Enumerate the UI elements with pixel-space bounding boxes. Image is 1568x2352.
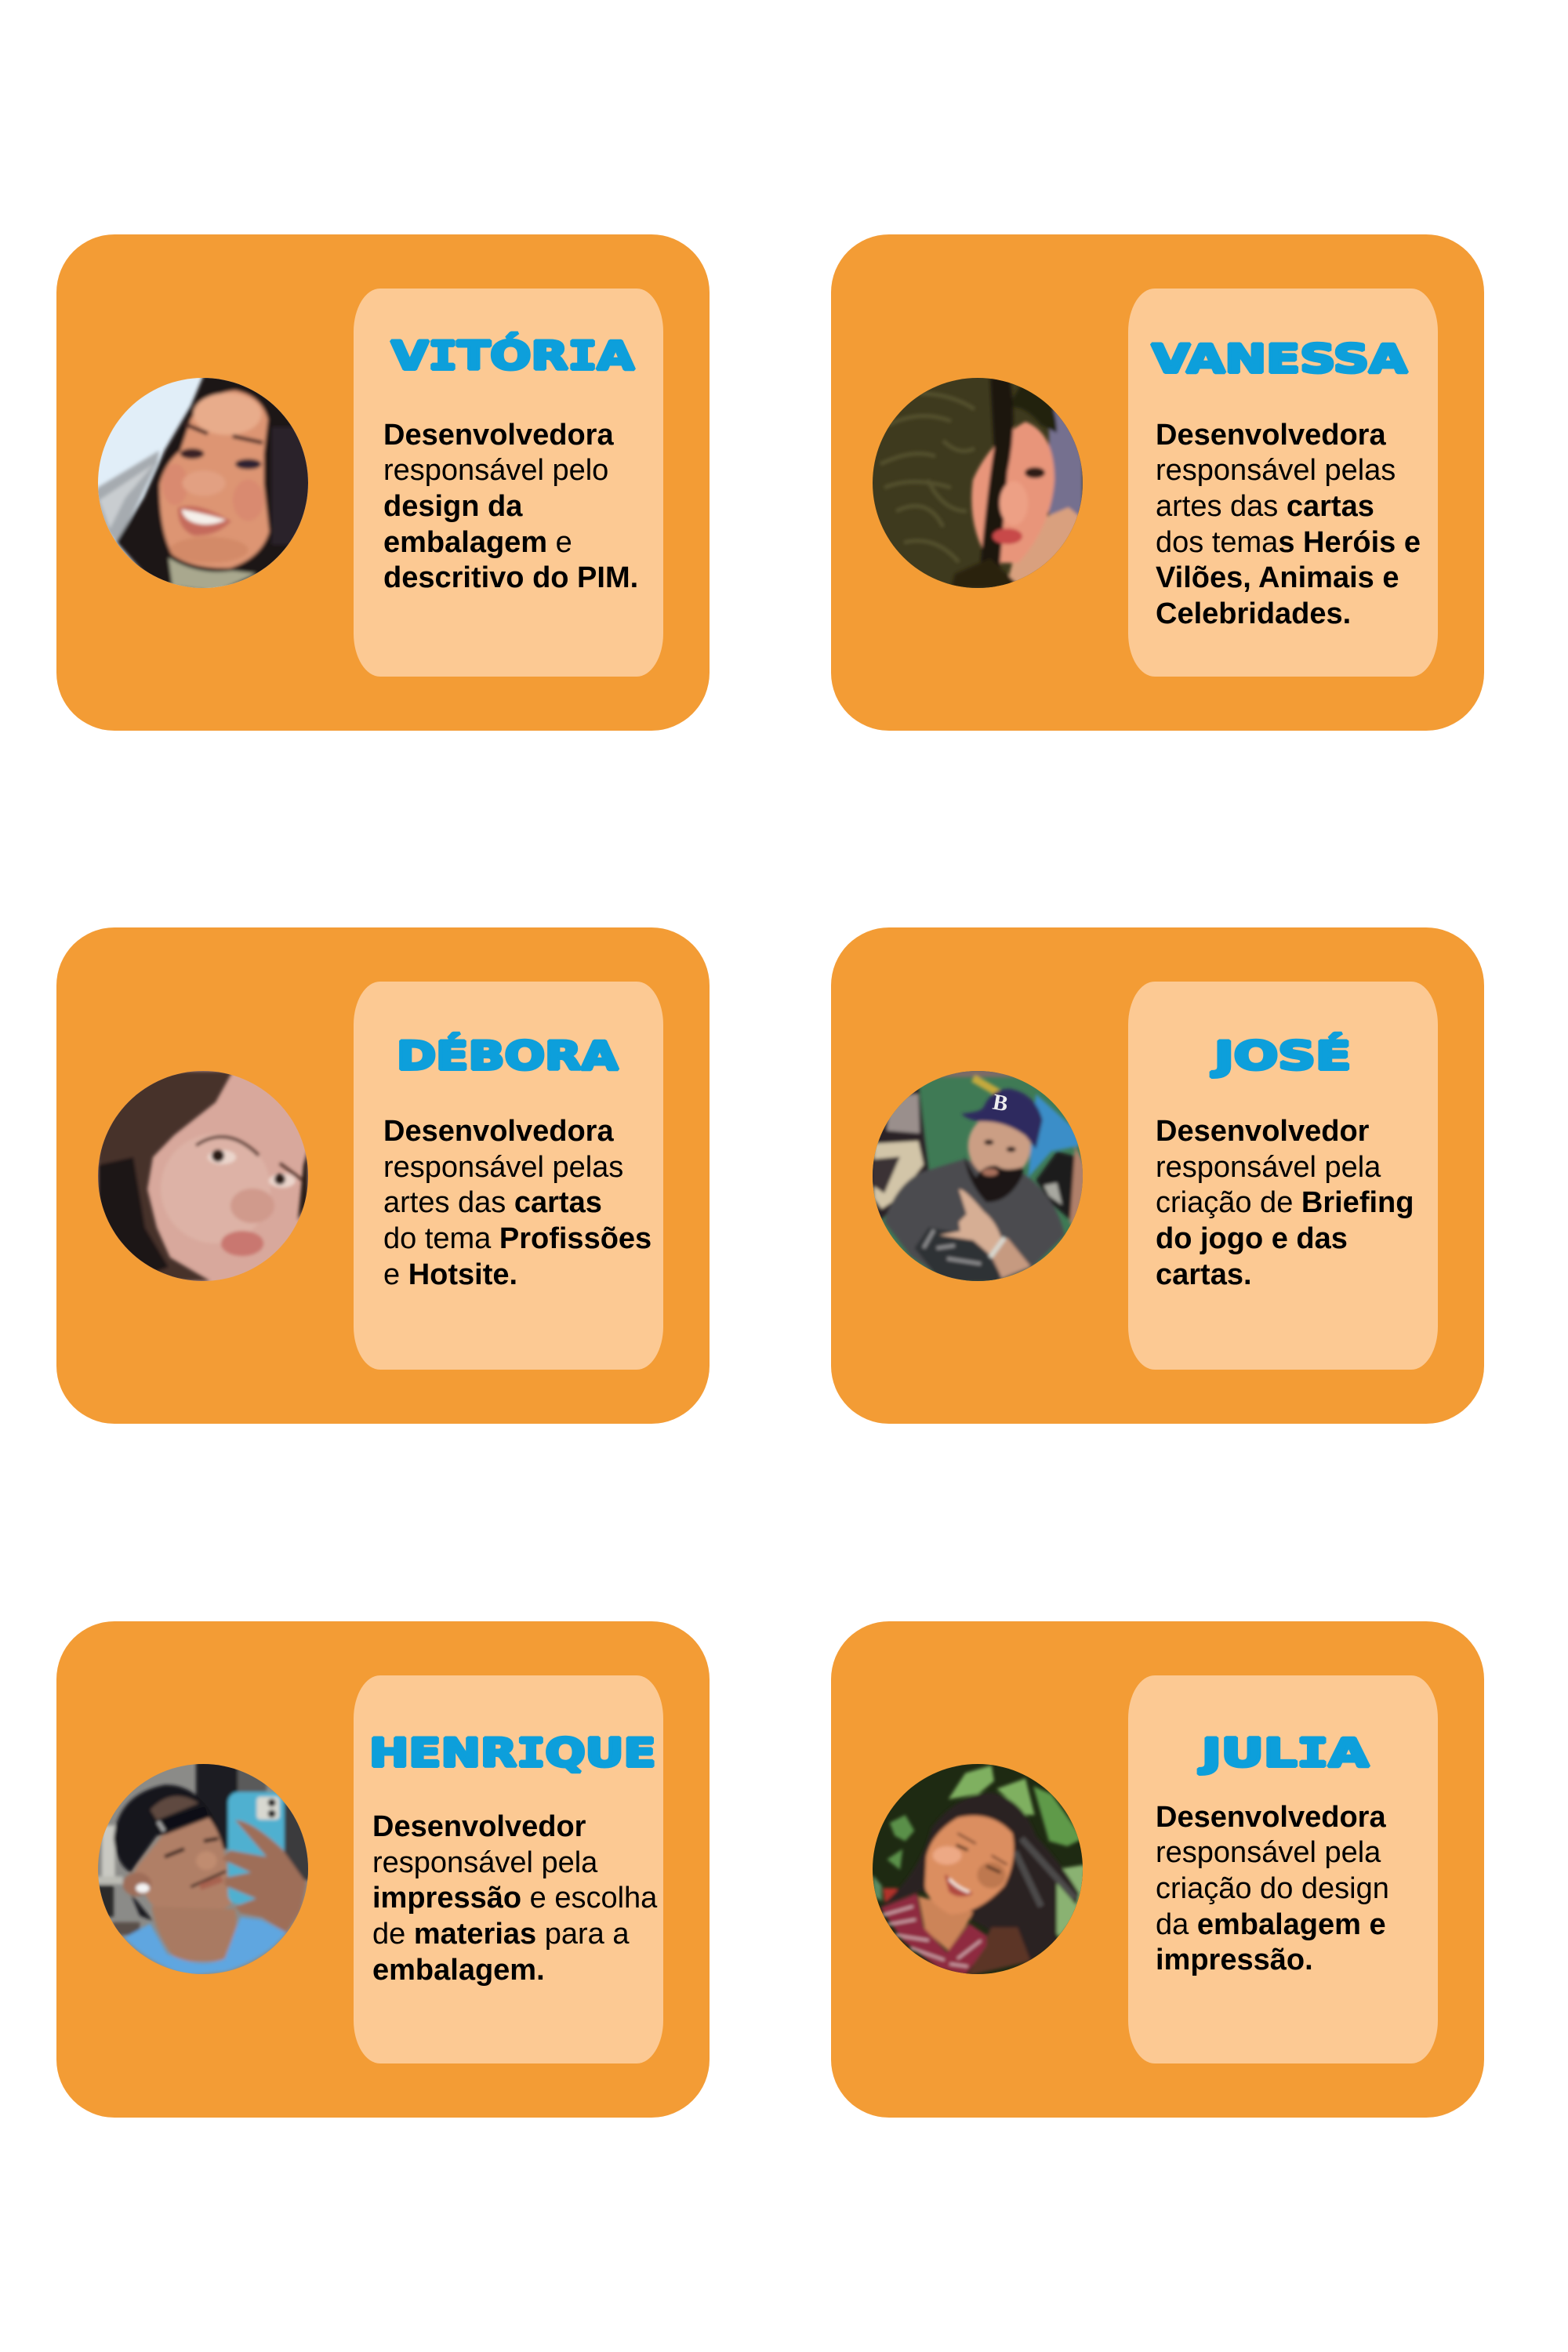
name: Henrique: HENR IQUE — [369, 1730, 656, 1776]
name: José: JOSÉ — [1211, 1033, 1351, 1079]
description: Débora: e Hotsite. — [383, 1258, 517, 1291]
name: Julia: JUL IA — [1199, 1730, 1369, 1776]
panel: Vitória card — [56, 234, 710, 731]
panel: Débora card — [56, 927, 710, 1424]
description: Débora: artes das cartas — [383, 1186, 602, 1219]
text panel: Vitória — [354, 289, 663, 677]
text panel: José — [1128, 982, 1438, 1370]
text panel: Henrique — [354, 1675, 663, 2063]
description: Vitória: embalagem e — [383, 526, 572, 559]
description: Débora — [383, 1115, 652, 1291]
description: Henrique: impressão e escolha — [372, 1882, 657, 1915]
description: Vanessa — [1156, 419, 1421, 630]
description: Débora: responsável pelas — [383, 1151, 623, 1184]
description: Vanessa: Vilões, Animais e — [1156, 561, 1399, 594]
description: José: cartas. — [1156, 1258, 1252, 1291]
description: Henrique — [372, 1810, 657, 1987]
description: Débora: do tema Profissões — [383, 1222, 652, 1255]
photo: Julia — [873, 1764, 1083, 1974]
description: Vanessa: dos temas Heróis e — [1156, 526, 1421, 559]
photo: Vitória — [98, 378, 308, 588]
description: Vanessa: responsável pelas — [1156, 454, 1396, 487]
text panel: Julia — [1128, 1675, 1438, 2063]
description: Julia: criação do design — [1156, 1872, 1389, 1905]
description: José: responsável pela — [1156, 1151, 1381, 1184]
name: Débora: DÉBORA — [397, 1033, 618, 1079]
panel: Henrique card — [56, 1621, 710, 2118]
cap logo: B — [991, 1090, 1010, 1116]
description: José: do jogo e das — [1156, 1222, 1348, 1255]
text panel: Débora — [354, 982, 663, 1370]
photo: José — [873, 1071, 1083, 1281]
name: Vanessa: VANESSA — [1152, 336, 1408, 382]
description: Vanessa: artes das cartas — [1156, 490, 1374, 523]
description: Henrique: de materias para a — [372, 1918, 629, 1951]
panel: Julia card — [831, 1621, 1484, 2118]
description: Julia — [1156, 1801, 1389, 1976]
description: José: Desenvolvedor — [1156, 1115, 1369, 1148]
photo: Henrique — [98, 1764, 308, 1974]
description: Julia: impressão. — [1156, 1944, 1313, 1976]
description: Henrique: embalagem. — [372, 1954, 545, 1987]
description: Henrique: Desenvolvedor — [372, 1810, 586, 1843]
panel: Vanessa card — [831, 234, 1484, 731]
description: Débora: Desenvolvedora — [383, 1115, 614, 1148]
photo: Débora — [98, 1071, 308, 1281]
description: Vanessa: Celebridades. — [1156, 597, 1351, 630]
name: Vitória: VITÓR IA — [391, 332, 634, 379]
description: Vitória: descritivo do PIM. — [383, 561, 638, 594]
description: Henrique: responsável pela — [372, 1846, 597, 1878]
text panel: Vanessa — [1128, 289, 1438, 677]
description: Julia: da embalagem e — [1156, 1908, 1386, 1941]
description: Vanessa: Desenvolvedora — [1156, 419, 1386, 452]
description: Vitória: design da — [383, 490, 522, 523]
description: José — [1156, 1115, 1414, 1291]
description: José: criação de Briefing — [1156, 1186, 1414, 1219]
photo: Vanessa — [873, 378, 1083, 588]
description: Julia: responsável pela — [1156, 1836, 1381, 1869]
panel: José card — [831, 927, 1484, 1424]
description: Julia: Desenvolvedora — [1156, 1801, 1386, 1834]
description: Vitória — [383, 419, 638, 594]
description: Vitória: Desenvolvedora — [383, 419, 614, 452]
description: Vitória: responsável pelo — [383, 454, 608, 487]
